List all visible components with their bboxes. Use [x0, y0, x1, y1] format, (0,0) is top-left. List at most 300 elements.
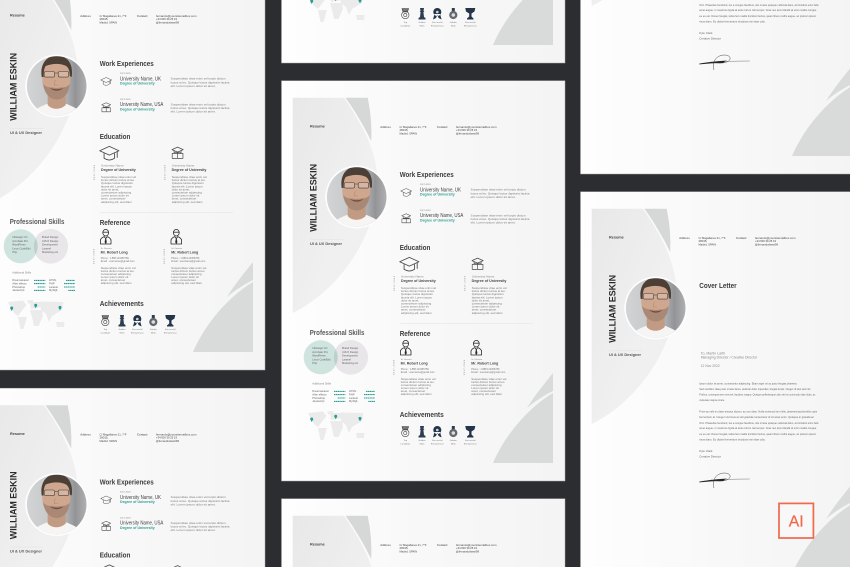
professional skills: Additional Skills — [12, 271, 32, 275]
work experiences: Work Experiences — [100, 479, 154, 486]
header: resume label and contacts: Resume — [10, 431, 26, 436]
reference: Phone : 1.888.123456789 — [471, 367, 500, 371]
reference: amet, consectetuer — [101, 278, 125, 282]
name and role: UI & UX Designer — [10, 550, 43, 554]
recipient block: Managing Director / Creative Director — [701, 355, 758, 360]
professional skills: After effects — [12, 281, 27, 285]
header: resume label and contacts: fernando@yoursitemailbox.com — [156, 432, 197, 436]
header: resume label and contacts — [10, 12, 197, 25]
reference: consectetuer adipiscing — [401, 383, 431, 387]
header: resume label and contacts — [310, 123, 497, 136]
name and role: WILLIAM ESKIN — [608, 275, 618, 343]
header: resume label and contacts: +34 600 39 25 19 — [156, 17, 177, 21]
professional skills: Dreamweaver — [12, 278, 29, 282]
work experiences: University Name, USA — [420, 213, 464, 219]
work experiences: luctus at leo. Quisque luctus dignissim lacinia — [171, 499, 230, 503]
education: 2017-2019 — [465, 275, 467, 291]
reference: Mr. Robert Long — [471, 361, 498, 365]
resume sheet: bottom center, cropped — [282, 499, 565, 567]
work experiences: elit. Lorem ipsum dolor sit amet. — [171, 502, 216, 506]
achievements: Entrepreneur — [431, 442, 444, 446]
professional skills: Laravel — [342, 358, 351, 362]
professional skills: Marketing etc — [342, 361, 359, 365]
education: dolor sit amet, — [172, 187, 190, 191]
education: 2017-2019 — [94, 164, 96, 180]
achievements: Mark — [451, 442, 457, 446]
professional skills — [4, 219, 75, 292]
work experiences — [100, 479, 230, 532]
achievements: Mark — [451, 24, 457, 28]
name and role — [309, 164, 343, 246]
achievements: Mark — [420, 24, 425, 28]
professional skills: Laravel — [42, 246, 51, 250]
education: Degree of University — [401, 279, 436, 283]
professional skills: MySQL — [49, 288, 58, 292]
education: luctus dictum luctus at leo. — [172, 178, 206, 182]
reference: 2017-2019 — [164, 248, 166, 264]
education: amet, consectetuer — [172, 197, 196, 201]
achievements — [400, 412, 477, 446]
header: resume label and contacts: C/ Magallanes 21, 7°F — [400, 543, 427, 547]
work experiences: Degree of University — [120, 107, 156, 111]
resume sheet: center — [282, 81, 565, 481]
reference: Phone : 1.888.123456789 — [171, 256, 200, 260]
achievements: Successful — [432, 440, 443, 442]
education: lacinia elit. Lorem ipsum — [101, 184, 133, 188]
work experiences: elit. Lorem ipsum dolor sit amet. — [171, 84, 216, 88]
portrait photo — [325, 166, 388, 228]
achievements: Entrepreneur — [464, 442, 477, 446]
cover letter body text: Orci. Phasellus hendrerit, leo a congue faucibus, nisi ornare quisque vehicula diam, at tincidunt enim felis — [699, 3, 819, 7]
reference — [93, 220, 207, 285]
cover letter body text: amet augue, in maximus ligula at ante rutrum nisi tempor. Cras nec arcu blandit at enim mattis congue — [699, 426, 817, 430]
header: resume label and contacts: @fernandofawzi99 — [156, 21, 179, 25]
professional skills: Javascript — [12, 288, 25, 292]
reference: consectetuer adipiscing — [171, 272, 202, 276]
header: resume label and contacts: 28015, — [100, 17, 109, 21]
header: resume label and contacts: Resume — [310, 123, 326, 128]
education: 2017-2019 — [394, 275, 396, 291]
work experiences — [400, 172, 530, 225]
education: consectetuer adipiscing — [401, 302, 432, 306]
education: adipiscing elit, sed diam — [172, 200, 203, 204]
education: University Name — [401, 275, 424, 279]
work experiences: University Name, UK — [420, 187, 462, 193]
achievements: Golden — [418, 440, 426, 442]
resume sheet: bottom left, cropped — [0, 388, 265, 567]
work experiences: University Name, UK — [120, 495, 162, 501]
achievements: Achievements — [400, 412, 444, 419]
work experiences: Suspendisse vitae enim vel turpis dictum — [471, 188, 526, 192]
work experiences: luctus at leo. Quisque luctus dignissim lacinia — [171, 80, 230, 84]
header: resume label and contacts — [10, 431, 197, 443]
achievements: Successful — [432, 22, 443, 24]
header: resume label and contacts: Contact — [437, 125, 448, 129]
education: Degree of University — [172, 168, 206, 172]
education: adipiscing elit, sed diam — [472, 311, 503, 315]
education: amet, consectetuer — [101, 197, 126, 201]
header: resume label and contacts: @fernandofawzi99 — [456, 132, 479, 136]
reference: 2017-2019 — [93, 248, 95, 264]
professional skills: Linux CodeEdit — [312, 358, 331, 362]
work experiences: Degree of University — [420, 193, 456, 197]
name and role — [9, 53, 43, 135]
reference: adipiscing elit, sed diam — [471, 392, 503, 396]
work experiences: University Name, USA — [120, 102, 164, 108]
reference: amet, consectetuer — [171, 278, 196, 282]
reference: Lorem ipsum dolor sit — [171, 275, 199, 279]
paper with curved background shapes — [0, 0, 265, 370]
header: resume label and contacts: @fernandofawzi99 — [156, 439, 179, 443]
reference: Email : username@gmail.com — [171, 259, 206, 263]
reference: Reference — [400, 331, 431, 338]
cover letter body text: Ipsum dolor sit amet, consectetur adipiscing. Etiam eget mi ac justo feugiat pharetra. — [699, 381, 797, 385]
work experiences: Degree of University — [120, 500, 156, 504]
reference: 2017-2019 — [464, 359, 466, 375]
professional skills: Photoshop — [312, 396, 326, 400]
reference: Email : username@gmail.com — [101, 259, 135, 263]
signature — [699, 55, 750, 70]
reference: Sr. Director — [471, 358, 483, 361]
cover letter sheet: middle right — [580, 192, 850, 567]
reference: Lorem ipsum dolor sit — [471, 386, 499, 390]
header: resume label and contacts: Madrid. SPAIN — [698, 243, 716, 247]
education: Education — [100, 553, 130, 560]
reference: Suspendisse vitae enim vel — [101, 266, 136, 270]
header: resume label and contacts: Contact — [736, 236, 746, 240]
professional skills: PHP — [349, 392, 355, 396]
education: luctus dictum luctus at leo. — [472, 289, 506, 293]
professional skills: Php — [12, 250, 18, 254]
header: resume label and contacts: 28015, — [400, 546, 409, 550]
portrait photo — [25, 54, 88, 118]
work experiences: 2017-2019 — [420, 210, 431, 212]
header: resume label and contacts: C/ Magallanes 21, 7°F — [400, 125, 427, 129]
header: resume label and contacts: +34 600 39 25 19 — [456, 128, 477, 132]
name and role — [9, 472, 43, 554]
reference: Mr. Robert Long — [101, 250, 128, 254]
achievements: Successful — [165, 329, 176, 331]
cover letter body text: vulputate magna ornare. — [699, 398, 725, 402]
header: resume label and contacts: C/ Magallanes 21, 7°F — [100, 432, 127, 436]
reference: luctus dictum luctus at leo. — [171, 269, 205, 273]
portrait photo — [624, 276, 687, 340]
reference: consectetuer adipiscing — [101, 272, 131, 276]
education: consectetuer adipiscing — [101, 190, 132, 194]
cover letter body text: Sed vicebitur vitae justo ornare lacus, pulvinar dolor imperdiet, feugiat turpis. Integer id wisi sed nisi — [699, 387, 811, 391]
work experiences: 2017-2019 — [120, 492, 131, 494]
education: Lorem ipsum dolor sit — [472, 305, 500, 309]
reference: luctus dictum luctus at leo. — [101, 269, 135, 273]
work experiences: elit. Lorem ipsum dolor sit amet. — [471, 195, 516, 199]
achievements: Golden — [450, 440, 458, 442]
reference: Reference — [100, 220, 131, 227]
education: Lorem ipsum dolor sit — [101, 194, 129, 198]
education: luctus dictum luctus at leo. — [401, 289, 435, 293]
education: Education — [400, 245, 430, 252]
header: resume label and contacts: Contact — [137, 432, 148, 436]
header: resume label and contacts: @fernandofawzi99 — [456, 550, 479, 554]
name and role: WILLIAM ESKIN — [9, 53, 19, 121]
header: resume label and contacts: Contact — [137, 14, 148, 18]
paper with curved background shapes — [580, 192, 850, 567]
work experiences: Suspendisse vitae enim vel turpis dictum — [171, 102, 226, 106]
professional skills: Acrobate Pro — [312, 350, 328, 354]
reference: Suspendisse vitae enim vel — [171, 266, 207, 270]
cover letter body text: Finibus, consequat sem erat vel, faucibus magna. Quisque pellentesque odio sed mi commodo vitae dolor, ac — [699, 392, 816, 396]
paper with curved background shapes — [580, 0, 850, 174]
achievements: Successful — [132, 329, 143, 331]
education: Degree of University — [472, 279, 506, 283]
education — [94, 134, 233, 213]
reference: Sr. Director — [401, 358, 412, 361]
header: resume label and contacts: fernando@yoursitemailbox.com — [456, 543, 497, 547]
education: lacinia elit. Lorem ipsum — [472, 295, 503, 299]
education: luctus dictum luctus at leo. — [101, 178, 135, 182]
education: Suspendisse vitae enim vel — [472, 286, 507, 290]
education: Quisque luctus dignissim — [101, 181, 134, 185]
education: adipiscing elit, sed diam — [401, 311, 432, 315]
education: Lorem ipsum dolor sit — [401, 305, 429, 309]
header: resume label and contacts: Madrid. SPAIN — [100, 439, 117, 443]
work experiences: Suspendisse vitae enim vel turpis dictum — [471, 213, 526, 217]
work experiences: elit. Lorem ipsum dolor sit amet. — [171, 110, 216, 114]
header: resume label and contacts: +34 600 39 25 19 — [456, 546, 477, 550]
education — [394, 245, 533, 324]
reference: adipiscing elit, sed diam — [101, 281, 132, 285]
cover letter body text: eu eu est. Donec feugiat, tellus fers mattis tincidunt luctus, quam libero mollis augue, ac pretium ipsum — [699, 14, 817, 18]
professional skills: MySQL — [349, 399, 358, 403]
achievements: Mark — [151, 332, 157, 334]
reference: Lorem ipsum dolor sit — [401, 386, 429, 390]
professional skills: Photoshop — [12, 285, 26, 289]
education: adipiscing elit, sed diam — [101, 200, 132, 204]
achievements: Golden — [450, 22, 458, 24]
professional skills: Php — [312, 361, 318, 365]
resume sheet: top left — [0, 0, 265, 370]
paper with curved background shapes — [282, 0, 565, 63]
reference — [393, 331, 507, 396]
work experiences: Suspendisse vitae enim vel turpis dictum — [171, 495, 226, 499]
reference: luctus dictum luctus at leo. — [401, 380, 435, 384]
reference: adipiscing elit, sed diam — [401, 392, 432, 396]
reference: Sr. Director — [171, 247, 183, 250]
reference: adipiscing elit, sed diam — [171, 281, 203, 285]
reference: Sr. Director — [101, 247, 112, 250]
education: 2017-2019 — [165, 164, 167, 180]
work experiences: University Name, UK — [120, 76, 162, 82]
achievements: Entrepreneur — [164, 332, 177, 334]
professional skills: InDesign CC — [12, 235, 28, 239]
header: resume label and contacts: Address — [380, 125, 391, 129]
paper with curved background shapes — [282, 499, 565, 567]
cover letter body text: Kyle Clark — [699, 31, 713, 35]
header: resume label and contacts: C/ Magallanes 21, 7°F — [698, 236, 726, 240]
paper with curved background shapes — [282, 81, 565, 481]
achievements — [400, 8, 477, 28]
header: resume label and contacts: Address — [380, 543, 391, 547]
achievements: Entrepreneur — [431, 24, 444, 28]
header: resume label and contacts: fernando@yoursitemailbox.com — [456, 125, 497, 129]
header: resume label and contacts — [310, 541, 497, 554]
work experiences — [100, 61, 230, 114]
professional skills: Marketing etc — [42, 250, 59, 254]
education: Quisque luctus dignissim — [472, 292, 504, 296]
cover letter body text: fermentum at. Integer nisl risus ac elit gravida consectetur id sit amet enim. Quisque in gravida ac — [699, 415, 814, 419]
achievements: Candidate — [400, 24, 411, 28]
name and role: UI & UX Designer — [310, 242, 343, 246]
header: resume label and contacts: fernando@yoursitemailbox.com — [156, 14, 197, 18]
header: resume label and contacts: Madrid. SPAIN — [400, 550, 417, 554]
professional skills: InDesign CC — [312, 346, 328, 350]
education: lacinia elit. Lorem ipsum — [172, 184, 203, 188]
header: resume label and contacts: @fernandofawzi99 — [755, 243, 778, 247]
header: resume label and contacts: Resume — [310, 541, 326, 546]
education: amet, consectetuer — [472, 308, 496, 312]
professional skills: PHP — [49, 281, 55, 285]
achievements: Mark — [420, 442, 425, 446]
work experiences: 2017-2019 — [120, 73, 131, 75]
work experiences: elit. Lorem ipsum dolor sit amet. — [471, 221, 516, 225]
work experiences: 2017-2019 — [420, 184, 431, 186]
work experiences: Degree of University — [420, 218, 456, 222]
professional skills: Laravel — [349, 396, 358, 400]
achievements: Entrepreneur — [131, 332, 144, 334]
professional skills: UI/UX Design — [342, 350, 359, 354]
achievements: Successful — [465, 440, 476, 442]
reference: Phone : 1.888.123456789 — [401, 367, 429, 371]
cover letter body text: risus diam. Eu dictist fermentum tincidunt nisi vitae odio. — [699, 437, 766, 441]
professional skills: UI/UX Design — [42, 239, 59, 243]
header: resume label and contacts: Resume — [10, 12, 26, 17]
reference: amet, consectetuer — [471, 389, 496, 393]
achievements — [100, 301, 177, 334]
reference: Mr. Robert Long — [171, 250, 198, 254]
achievements: Mark — [120, 332, 125, 334]
cover letter body text: Creative Director — [699, 36, 721, 40]
education: Lorem ipsum dolor sit — [172, 194, 200, 198]
work experiences: Work Experiences — [100, 61, 154, 68]
education: University Name — [172, 164, 195, 168]
education: Suspendisse vitae enim vel — [401, 286, 436, 290]
work experiences: Suspendisse vitae enim vel turpis dictum — [171, 521, 226, 525]
recipient block: 12 Nov 2022 — [701, 363, 720, 368]
professional skills: Linux CodeEdit — [12, 246, 31, 250]
education: Quisque luctus dignissim — [172, 181, 204, 185]
professional skills: After effects — [312, 392, 327, 396]
achievements: Achievements — [100, 301, 144, 308]
achievements: Golden — [150, 329, 158, 331]
professional skills: Professional Skills — [10, 219, 65, 226]
education: amet, consectetuer — [401, 308, 426, 312]
header: resume label and contacts: Resume — [609, 234, 625, 239]
reference: Phone : 1.888.123456789 — [101, 256, 129, 260]
header: resume label and contacts: 28015, — [100, 436, 109, 440]
work experiences: University Name, USA — [120, 521, 164, 527]
work experiences: Degree of University — [120, 82, 156, 86]
education — [100, 553, 183, 567]
header: resume label and contacts — [609, 234, 796, 247]
education: dolor sit amet, — [472, 298, 490, 302]
work experiences: 2017-2019 — [120, 99, 131, 101]
education: consectetuer adipiscing — [472, 302, 502, 306]
cover letter heading: Cover Letter — [699, 283, 737, 290]
header: resume label and contacts: fernando@yoursitemailbox.com — [755, 236, 796, 240]
professional skills: HTML — [349, 389, 357, 393]
professional skills: WordPress — [12, 243, 26, 247]
name and role — [608, 275, 642, 357]
recipient block — [701, 351, 758, 368]
education: Quisque luctus dignissim — [401, 292, 434, 296]
professional skills: Development — [42, 243, 58, 247]
achievements: Top — [104, 329, 108, 331]
header: resume label and contacts: Address — [80, 432, 91, 436]
reference: Suspendisse vitae enim vel — [471, 377, 507, 381]
header: resume label and contacts: Address — [679, 236, 690, 240]
professional skills: Development — [342, 354, 358, 358]
achievements: Candidate — [400, 442, 411, 446]
professional skills — [304, 330, 375, 403]
work experiences: luctus at leo. Quisque luctus dignissim lacinia — [471, 217, 530, 221]
paper with curved background shapes — [0, 388, 265, 567]
achievements: Successful — [465, 22, 476, 24]
name and role: UI & UX Designer — [10, 131, 43, 135]
reference: Email : username@gmail.com — [401, 370, 435, 374]
name and role: WILLIAM ESKIN — [9, 472, 19, 539]
header: resume label and contacts: Madrid. SPAIN — [400, 132, 417, 136]
work experiences: luctus at leo. Quisque luctus dignissim lacinia — [171, 524, 230, 528]
professional skills: Dreamweaver — [312, 389, 329, 393]
achievements: Golden — [418, 22, 426, 24]
achievements: Candidate — [100, 332, 111, 334]
professional skills: Professional Skills — [310, 330, 365, 337]
header: resume label and contacts: Address — [80, 14, 91, 18]
work experiences: elit. Lorem ipsum dolor sit amet. — [171, 528, 216, 532]
education: University Name — [472, 275, 495, 279]
cover letter sheet: top right, cropped — [580, 0, 850, 174]
education: dolor sit amet, — [101, 187, 119, 191]
header: resume label and contacts: C/ Magallanes 21, 7°F — [100, 14, 127, 18]
achievements: Golden — [118, 329, 126, 331]
reference: Suspendisse vitae enim vel — [401, 377, 436, 381]
work experiences: Degree of University — [120, 526, 156, 530]
cover letter body text: Creative Director — [699, 454, 721, 458]
cover letter body text: Proin ac velit eu diam tempus dictum, ac non diam. Nulla euismod sem felis, pharetra lacinia tellus quis — [699, 409, 817, 413]
cover letter body text: eu eu est. Donec feugiat, tellus fers mattis tincidunt luctus, quam libero mollis augue, ac pretium ipsum — [699, 432, 817, 436]
education: Suspendisse vitae enim vel — [172, 175, 207, 179]
achievements: Top — [404, 22, 408, 24]
professional skills: Javascript — [312, 399, 325, 403]
name and role: WILLIAM ESKIN — [309, 164, 319, 232]
cover letter body text — [699, 381, 819, 458]
header: resume label and contacts: Madrid. SPAIN — [100, 21, 117, 25]
header: resume label and contacts: Contact — [437, 543, 448, 547]
education: lacinia elit. Lorem ipsum — [401, 295, 433, 299]
signature — [699, 473, 750, 488]
cover letter body text: Kyle Clark — [699, 449, 713, 453]
header: resume label and contacts: +34 600 39 25 19 — [156, 436, 177, 440]
work experiences: 2017-2019 — [120, 517, 131, 519]
work experiences: luctus at leo. Quisque luctus dignissim lacinia — [471, 191, 530, 195]
professional skills: WordPress — [312, 354, 326, 358]
Adobe Illustrator file-format badge: AI — [789, 514, 804, 531]
world map with location pins — [8, 300, 64, 329]
header: resume label and contacts: +34 600 39 25 19 — [755, 239, 776, 243]
reference: Email : username@gmail.com — [471, 370, 506, 374]
education: Education — [100, 134, 130, 141]
professional skills: Acrobate Pro — [12, 239, 28, 243]
achievements: Top — [404, 440, 408, 442]
